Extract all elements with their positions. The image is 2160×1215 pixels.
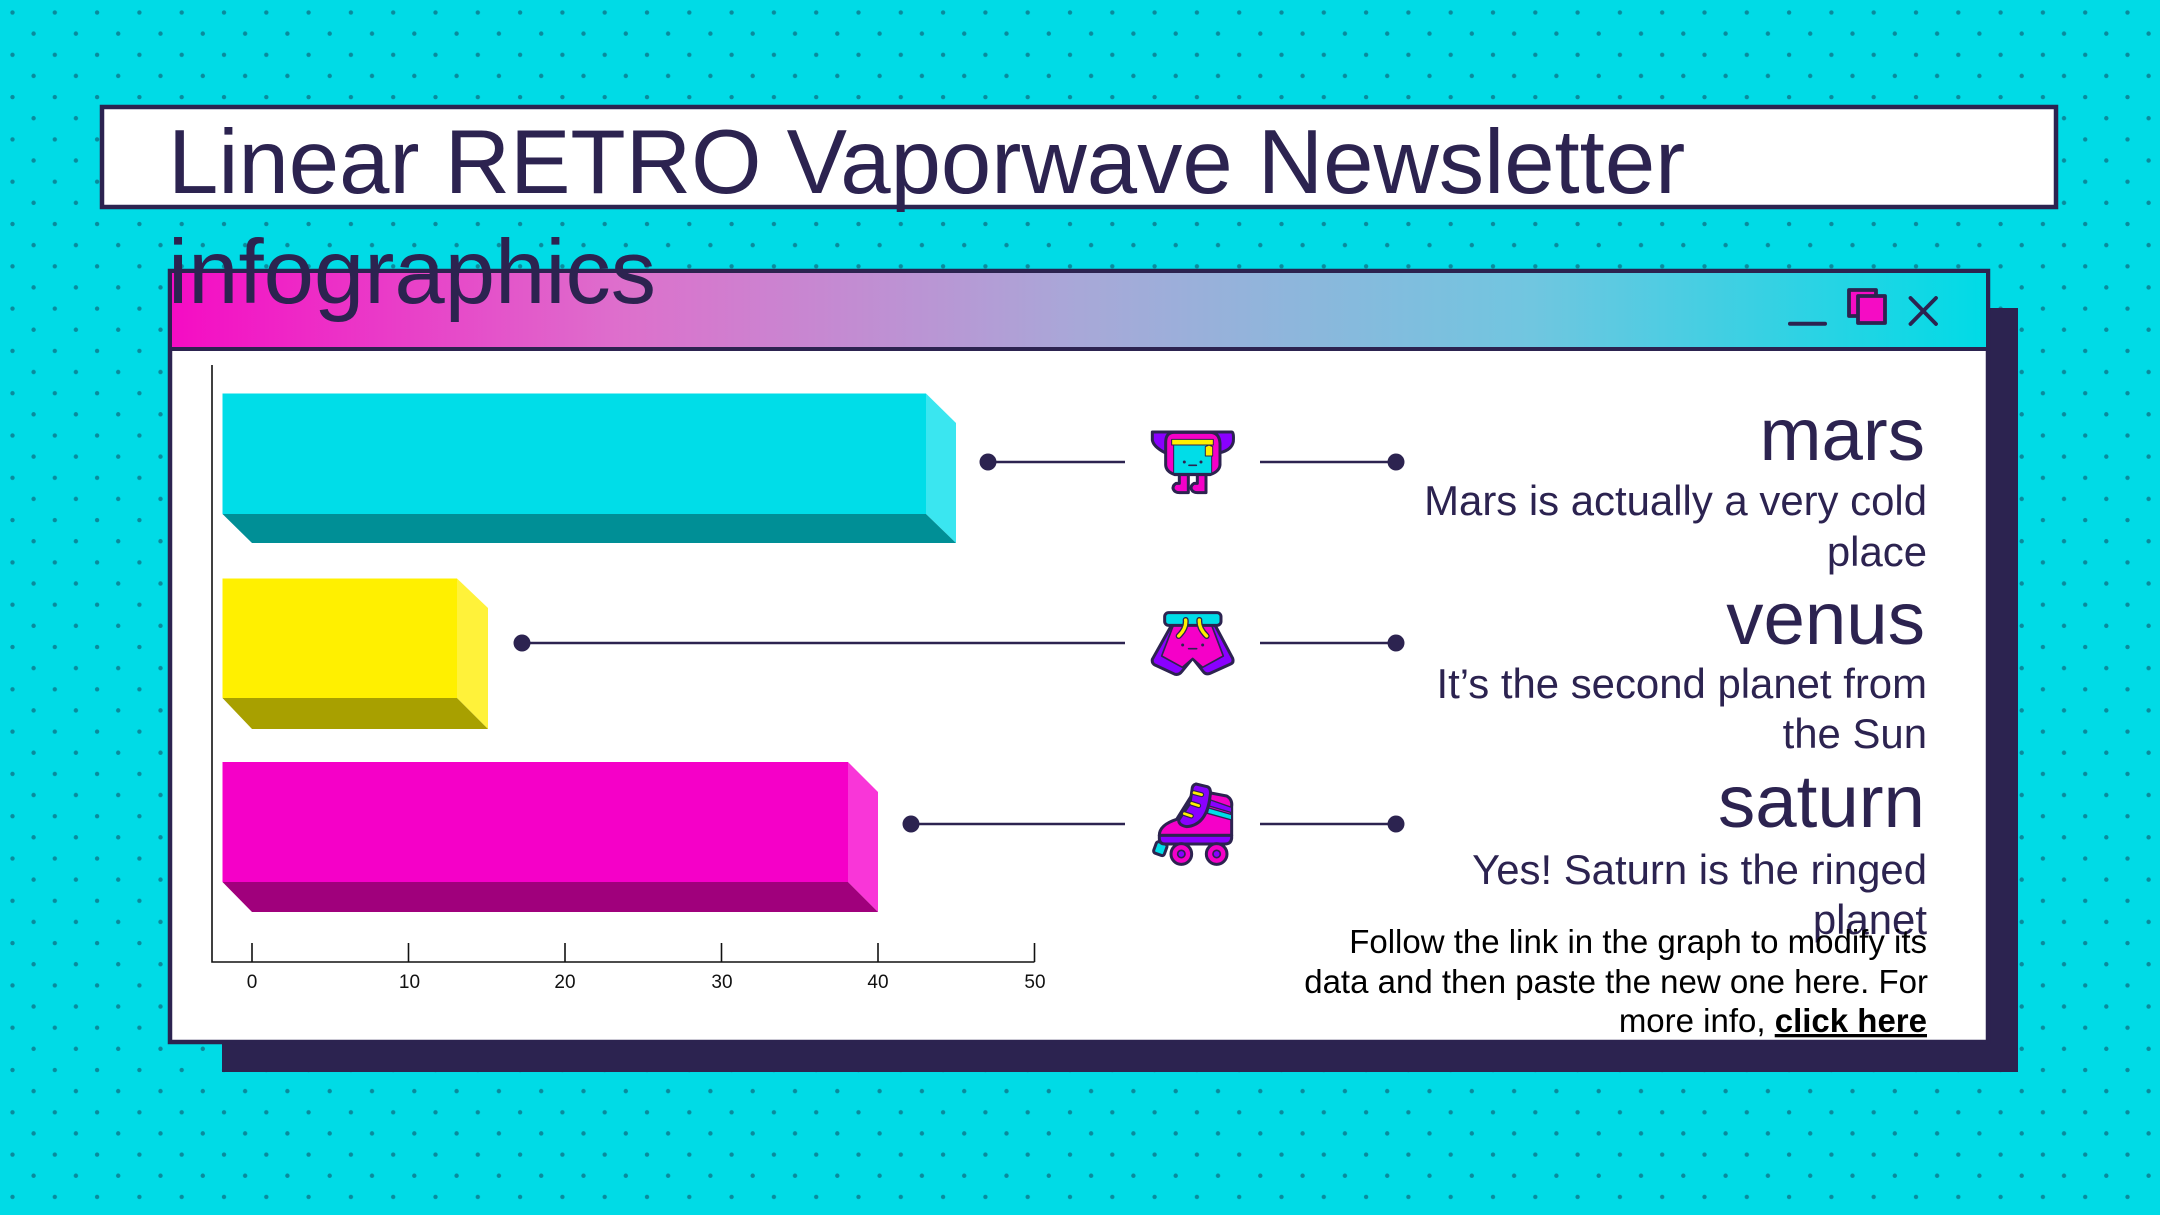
text block: venus: venus xyxy=(1726,577,1925,660)
text block: saturn: planet xyxy=(1813,896,1927,943)
text block: saturn xyxy=(1472,760,1927,943)
axis labels: 50 xyxy=(1024,972,1046,993)
title xyxy=(168,112,1685,323)
axis labels: 30 xyxy=(711,972,733,993)
window body xyxy=(170,271,1988,1042)
connector: saturn xyxy=(902,816,1404,832)
axis labels xyxy=(247,972,1046,993)
text block: venus: It’s the second planet from xyxy=(1436,660,1927,707)
title: Linear RETRO Vaporwave Newsletter xyxy=(168,112,1685,213)
bar chart xyxy=(212,365,1046,993)
text block: saturn: Yes! Saturn is the ringed xyxy=(1472,846,1927,893)
icon: shorts xyxy=(1152,613,1233,674)
icon: fanny pack xyxy=(1152,432,1233,493)
text block: mars xyxy=(1424,393,1927,575)
text block: mars: Mars is actually a very cold xyxy=(1424,477,1927,524)
footnote: more info, click here xyxy=(1619,1002,1927,1039)
window title bar xyxy=(172,273,1986,348)
axis labels: 0 xyxy=(247,972,257,993)
bar: saturn xyxy=(222,762,878,912)
text block: venus: the Sun xyxy=(1783,710,1927,757)
connector: mars xyxy=(980,454,1404,470)
axis labels: 40 xyxy=(867,972,889,993)
text block: venus xyxy=(1436,577,1927,757)
icon: roller skate xyxy=(1153,784,1232,864)
axis labels: 20 xyxy=(554,972,576,993)
connector: venus xyxy=(514,634,1404,652)
footnote: Follow the link in the graph to modify its xyxy=(1349,923,1927,960)
footnote: data and then paste the new one here. For xyxy=(1304,963,1928,1000)
footnote xyxy=(1304,923,1928,1039)
bar: mars xyxy=(222,394,956,543)
axes xyxy=(212,365,1034,962)
text block: saturn: saturn xyxy=(1718,760,1925,843)
title box xyxy=(102,107,2056,207)
text block: mars: mars xyxy=(1759,393,1925,476)
text block: mars: place xyxy=(1827,528,1927,575)
window shadow xyxy=(222,308,2018,1072)
bar: venus xyxy=(222,578,488,729)
window panel xyxy=(170,271,2018,1072)
axis labels: 10 xyxy=(399,972,420,993)
title: infographics xyxy=(168,222,656,323)
window controls xyxy=(1790,290,1936,324)
